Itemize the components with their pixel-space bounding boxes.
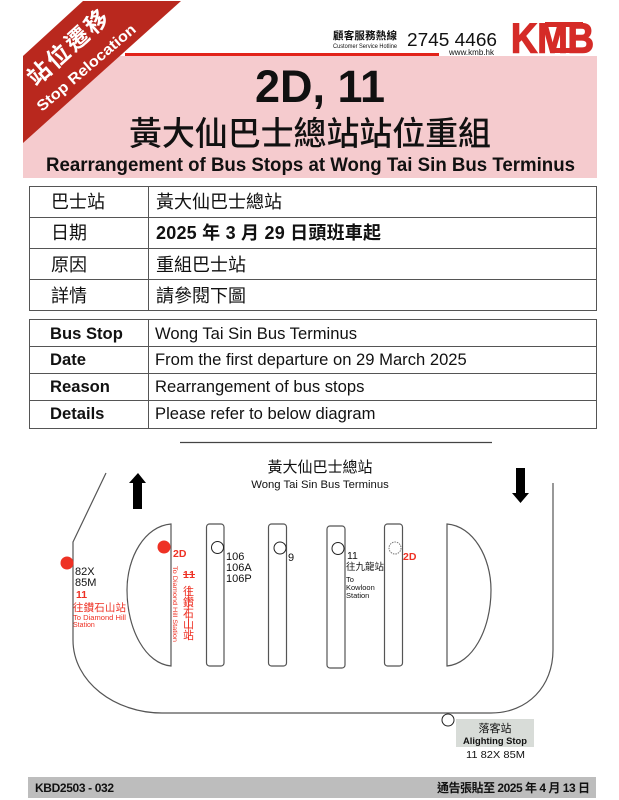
- Chinese information table: 黃大仙巴士總站: [156, 192, 282, 212]
- Chinese information table: 詳情: [51, 286, 87, 306]
- arrow: exit down: [512, 468, 529, 503]
- terminus name: Wong Tai Sin Bus Terminus: [251, 479, 389, 491]
- Chinese information table: 重組巴士站: [156, 255, 246, 275]
- footer bar: KBD2503 - 032: [35, 781, 114, 795]
- stop marker 106: [212, 542, 224, 554]
- terminus top edge: [180, 442, 492, 444]
- left kerb stop label: 82X: [75, 566, 95, 578]
- left kerb stop label: 往鑽石山站: [73, 601, 126, 614]
- English information table: Rearrangement of bus stops: [155, 377, 364, 396]
- old stop marker 2D: [389, 542, 401, 554]
- island stop label: removed route: 往鑽石山站: [183, 584, 194, 642]
- old stop label 2D: 2D: [403, 551, 417, 563]
- English information table: Reason: [50, 377, 110, 396]
- terminus name: [251, 459, 389, 491]
- terminus name: 黃大仙巴士總站: [267, 459, 373, 476]
- right half-moon island: [447, 524, 491, 666]
- stop marker 9: [274, 542, 286, 554]
- Chinese information table: 巴士站: [51, 192, 105, 212]
- new stop marker left: [60, 556, 74, 570]
- KMB logo: KMB: [511, 14, 594, 62]
- English title: Rearrangement of Bus Stops at Wong Tai Sin Bus Terminus: [46, 155, 575, 176]
- customer service hotline: 2745 4466: [407, 29, 497, 50]
- platform island 1: [206, 524, 224, 666]
- header: pink title panel: [23, 53, 597, 178]
- Chinese title: 黃大仙巴士總站站位重組: [129, 115, 491, 152]
- Chinese information table: 請參閱下圖: [156, 286, 246, 306]
- English information table: Date: [50, 350, 86, 369]
- alighting stop label: Alighting Stop: [463, 736, 527, 747]
- arrow: entry up: [129, 473, 146, 509]
- route label 106: 106: [226, 551, 244, 563]
- corner banner: stop relocation: 站位遷移: [22, 4, 114, 91]
- left kerb stop label: 85M: [75, 577, 96, 589]
- platform island 3: [327, 526, 345, 668]
- stop marker 11: [332, 542, 344, 554]
- route label 106: 106P: [226, 573, 252, 585]
- island stop label: removed route: To Diamond Hill Station: [171, 566, 178, 642]
- alighting stop label: [456, 719, 534, 761]
- route label 106: 106A: [226, 562, 252, 574]
- customer service hotline: Customer Service Hotline: [333, 43, 397, 50]
- alighting stop label: 落客站: [478, 721, 512, 735]
- Chinese information table: 原因: [51, 255, 87, 275]
- English information table: Details: [50, 404, 104, 423]
- left kerb stop label: Station: [73, 622, 95, 629]
- customer service hotline: www.kmb.hk: [448, 48, 495, 57]
- alighting stop label: 11 82X 85M: [466, 749, 525, 761]
- route label 106: [226, 551, 252, 585]
- Chinese information table: 日期: [51, 223, 87, 243]
- route label 11 to Kowloon Station: Station: [346, 591, 369, 600]
- left half-moon island: [127, 524, 171, 666]
- route numbers title: 2D, 11: [255, 61, 385, 112]
- English information table: Please refer to below diagram: [155, 404, 375, 423]
- English information table: Bus Stop: [50, 324, 123, 343]
- island stop label: removed route: 2D: [173, 548, 187, 560]
- new stop marker island: [158, 540, 170, 554]
- English information table: From the first departure on 29 March 2025: [155, 350, 467, 369]
- footer bar: [28, 777, 596, 798]
- terminus outer boundary: [73, 473, 553, 713]
- island stop label: removed route: 11: [183, 569, 195, 581]
- English information table: [29, 319, 597, 428]
- English information table: Wong Tai Sin Bus Terminus: [155, 324, 357, 343]
- corner banner: stop relocation: Stop Relocation: [34, 21, 140, 115]
- route label 11 to Kowloon Station: To: [346, 575, 354, 584]
- footer bar: 通告張貼至 2025 年 4 月 13 日: [437, 780, 590, 795]
- route label 11 to Kowloon Station: 11: [347, 550, 358, 562]
- left kerb stop label: [73, 566, 126, 629]
- left kerb stop label: 11: [76, 589, 87, 601]
- platform island 2: [268, 524, 286, 666]
- Chinese information table: [29, 186, 597, 310]
- terminus diagram: [60, 442, 553, 761]
- route label 11 to Kowloon Station: 往九龍站: [346, 561, 384, 573]
- Chinese information table: 2025 年 3 月 29 日頭班車起: [156, 222, 381, 243]
- customer service hotline: [333, 29, 497, 57]
- island stop label: removed route: [171, 548, 195, 642]
- alighting stop marker: [442, 714, 454, 726]
- route label 11 to Kowloon Station: [346, 550, 384, 600]
- corner banner: stop relocation: [22, 1, 181, 143]
- route label 9: 9: [288, 552, 294, 564]
- route label 11 to Kowloon Station: Kowloon: [346, 583, 375, 592]
- platform island 4: [384, 524, 402, 666]
- left kerb stop label: To Diamond Hill: [73, 615, 126, 622]
- customer service hotline: 顧客服務熱線: [333, 29, 398, 42]
